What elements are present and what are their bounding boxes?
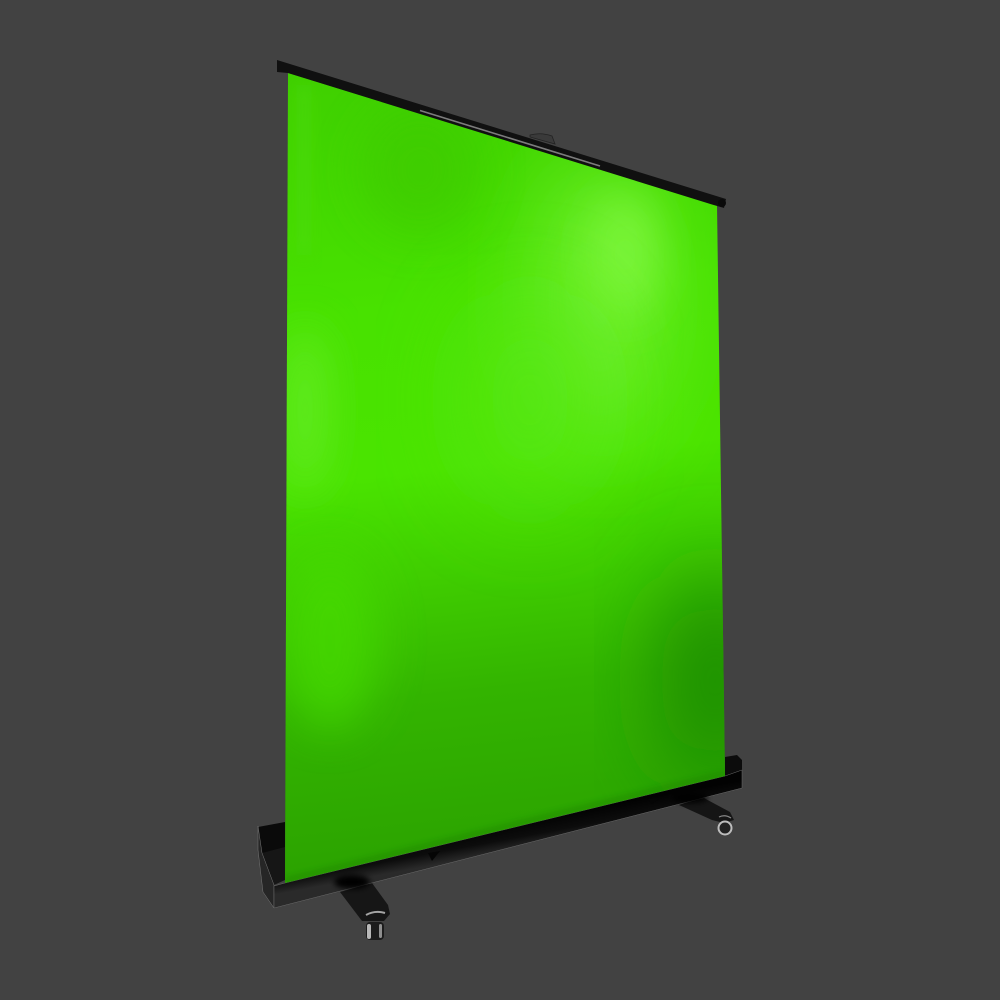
- broad glow centre: [493, 348, 560, 460]
- base: front bar: [274, 770, 742, 908]
- base: front bar clips: [428, 798, 660, 861]
- brighter lower left area: [286, 580, 384, 735]
- foot: right: [679, 797, 734, 834]
- bright highlight upper centre: [540, 160, 660, 440]
- wheel: left: [366, 922, 384, 940]
- wheel: right: [718, 822, 732, 834]
- top handle: [530, 134, 555, 144]
- base: left end cap: [258, 826, 274, 908]
- light vertical fold top left: [296, 85, 312, 255]
- darker lower right corner: [660, 570, 770, 790]
- foot shadows on the bar: [334, 793, 708, 889]
- product illustration: roll-up green screen: [258, 60, 742, 940]
- green screen cloth: [285, 73, 725, 883]
- base: rear wall of the housing: [258, 755, 742, 885]
- foot: left: [340, 883, 390, 940]
- bright glow left edge: [281, 325, 329, 495]
- shadow along the cloth bottom edge: [285, 771, 725, 883]
- top rail: [277, 60, 726, 208]
- darker band upper left: [380, 137, 461, 222]
